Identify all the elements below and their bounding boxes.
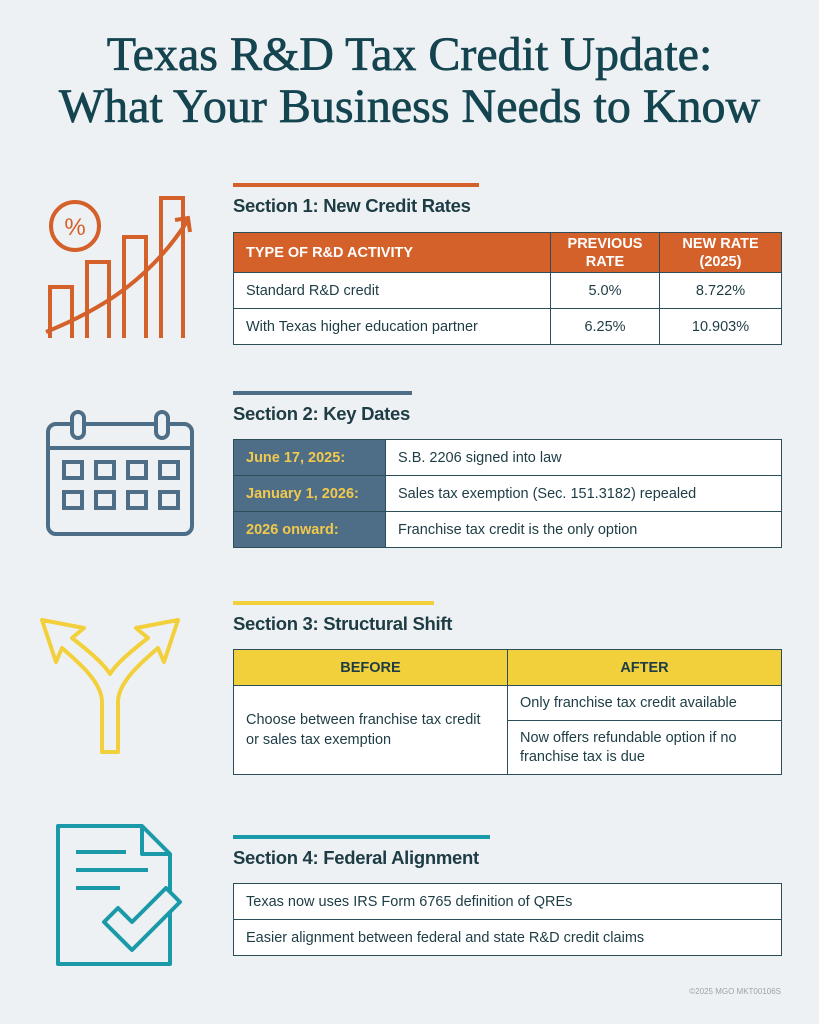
table: key dates: Sales tax exemption (Sec. 151.3182) repealed [398, 486, 696, 502]
table: before/after: Choose between franchise tax credit or sales tax exemption [246, 712, 481, 748]
table: credit rates: Standard R&D credit [246, 282, 379, 298]
section 4 [233, 835, 490, 868]
icon: document check [56, 824, 182, 966]
table: federal alignment [233, 883, 782, 956]
heading 2: Section 2: Key Dates [233, 403, 410, 424]
table: credit rates: 10.903% [692, 318, 749, 334]
table: federal alignment: Easier alignment between federal and state R&D credit claims [246, 930, 644, 946]
table: credit rates: RATE [586, 254, 624, 270]
heading 1: Section 1: New Credit Rates [233, 195, 471, 216]
section 2 [233, 391, 412, 424]
icon: split arrows [40, 618, 180, 754]
table: before/after: AFTER [620, 660, 669, 676]
section 3 [233, 601, 452, 634]
table: key dates: S.B. 2206 signed into law [398, 450, 562, 466]
table: credit rates: (2025) [700, 254, 741, 270]
heading 3: Section 3: Structural Shift [233, 613, 452, 634]
icon: calendar [46, 410, 194, 536]
table: federal alignment: Texas now uses IRS Form 6765 definition of QREs [246, 894, 572, 910]
table: credit rates: 6.25% [584, 318, 626, 334]
table: credit rates: PREVIOUS [568, 236, 642, 252]
table: credit rates: NEW RATE [682, 236, 759, 252]
table: key dates: January 1, 2026: [246, 486, 359, 502]
table: credit rates: With Texas higher education partner [246, 318, 478, 334]
table: before/after: Now offers refundable option if no franchise tax is due [520, 730, 737, 764]
footer credit: ©2025 MGO MKT00106S [689, 987, 781, 996]
table: credit rates: 5.0% [588, 282, 622, 298]
title: What Your Business Needs to Know [59, 80, 760, 133]
icon: growth chart: % [64, 214, 86, 241]
table: key dates [233, 439, 782, 548]
table: before/after [233, 649, 782, 775]
table: before/after: Only franchise tax credit available [520, 695, 737, 711]
title: Texas R&D Tax Credit Update: [107, 28, 712, 81]
title [58, 28, 760, 133]
table: credit rates [233, 232, 782, 345]
table: before/after: BEFORE [340, 660, 401, 676]
table: key dates: June 17, 2025: [246, 450, 345, 466]
heading 4: Section 4: Federal Alignment [233, 847, 479, 868]
table: key dates: 2026 onward: [246, 522, 339, 538]
table: credit rates: 8.722% [696, 282, 745, 298]
icon: growth chart [45, 196, 192, 338]
section 1 [233, 183, 479, 216]
table: key dates: Franchise tax credit is the only option [398, 522, 637, 538]
table: credit rates: TYPE OF R&D ACTIVITY [246, 244, 413, 260]
